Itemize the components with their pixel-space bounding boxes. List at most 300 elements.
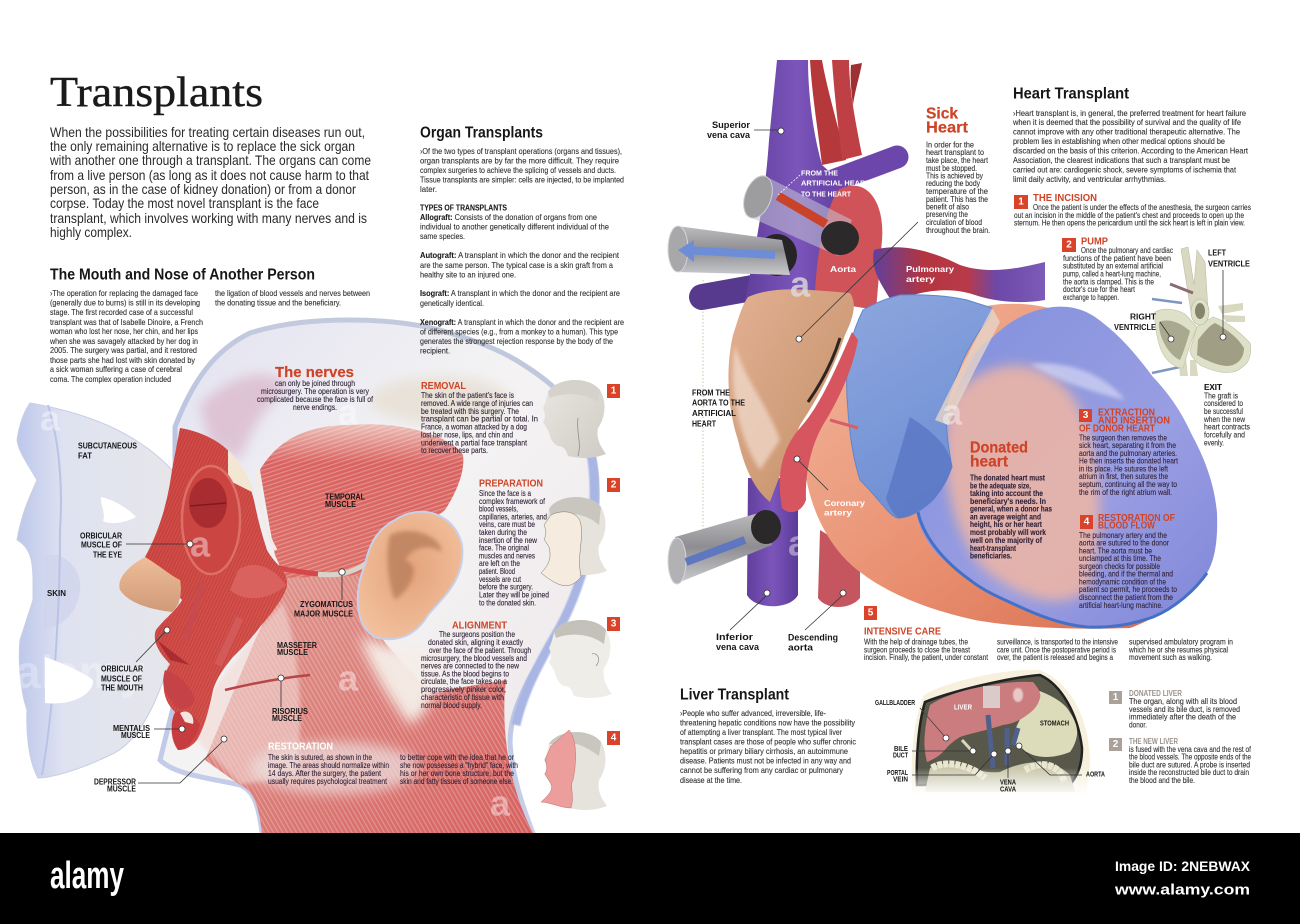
heart labels: artery (824, 508, 852, 518)
heart labels: Coronary (824, 498, 865, 508)
text block: mouth and nose: transplant was that of Isabelle Dinoire, a French (50, 317, 203, 327)
step: removal: lost her nose, lips, and chin and (421, 430, 513, 440)
face labels: ZYGOMATICUS (300, 600, 354, 609)
face labels: MUSCLE (325, 500, 357, 509)
lips (157, 640, 190, 665)
text block: heart transplant: carried out are: cardiogenic shock, severe symptoms of ischemia that (1013, 164, 1237, 174)
step 2: pump: exchange to happen. (1063, 292, 1119, 302)
face labels: ORBICULAR (80, 532, 122, 540)
title: Transplants (50, 70, 263, 116)
diagram: liver anatomy: LIVER (954, 704, 972, 712)
step: preparation: patient. Blood (479, 566, 515, 576)
diagram: liver anatomy (875, 670, 1105, 796)
zygomatic tendon (315, 562, 368, 575)
upper cannula (738, 172, 859, 256)
step 5: intensive care: which he or she resumes physical (1128, 644, 1228, 654)
step 3: extraction and insertion (1079, 408, 1178, 497)
step: preparation: are left on the (479, 558, 520, 568)
intro text: When the possibilities for treating certain diseases run out, (50, 124, 365, 140)
text block: organ transplants: same species. (420, 231, 465, 241)
callout: donated heart: beneficiaries. (970, 550, 1012, 560)
footer bar (0, 833, 1300, 924)
intro text (49, 124, 371, 240)
text block: organ transplants: healthy site to an injured one. (420, 270, 516, 280)
step: restoration: to better cope with the idea that he or (400, 752, 514, 762)
step 4: restoration of blood flow: The pulmonary artery and the (1079, 530, 1167, 540)
step 5: intensive care: surgeon proceeds to close the breast (864, 644, 970, 654)
text block: liver transplant: hepatitis or primary biliary cirrhosis, an autoimmune (680, 746, 848, 756)
intro text: highly complex. (50, 224, 132, 240)
watermark letters (788, 264, 963, 564)
icon: head step 2 (541, 497, 607, 586)
face labels: MUSCLE OF (81, 540, 122, 550)
step 5: intensive care: INTENSIVE CARE (864, 626, 941, 638)
ear (358, 512, 462, 639)
step: alignment: donated skin, aligning it exactly (428, 637, 524, 647)
text block: liver transplant: disease at the time. (680, 775, 742, 785)
heart labels: Inferior (716, 632, 753, 643)
text block: mouth and nose: woman who lost her nose, her chin, and her lips (49, 326, 198, 336)
heart labels: vena cava (707, 130, 751, 141)
face labels: THE MOUTH (101, 684, 143, 692)
text block: organ transplants: Xenograft: A transplant in which the donor and the recipient are (420, 317, 624, 327)
exit text (1203, 382, 1250, 448)
text block: heart transplant: cannot improve with any other traditional therapeutic alternative. The (1013, 126, 1240, 136)
eye hole (101, 497, 136, 523)
vessels (988, 715, 1018, 768)
diagram: small heart cross-section (1114, 247, 1251, 376)
step 2: pump: substituted by an external artificial (1063, 260, 1163, 270)
pale beige hair-like stripes (370, 376, 510, 424)
lower cannula (668, 510, 781, 584)
intro text: with another one through a transplant. The organs can come (49, 152, 371, 168)
step 3: extraction and insertion: aorta and the pulmonary arteries. (1079, 448, 1177, 458)
risorius (225, 675, 310, 690)
text block: mouth and nose: those parts she had lost with skin donated by (50, 355, 196, 365)
cream temple patch (228, 450, 254, 493)
step: restoration: she now possesses a "hybrid" face, with (400, 760, 518, 770)
step 4: restoration of blood flow: artificial heart-lung machine. (1079, 600, 1163, 610)
step badges: face: 4 (611, 732, 617, 744)
stomach (1013, 690, 1077, 757)
liver step 2: the new liver: 2 (1113, 739, 1119, 750)
callout: donated heart: most probably will work (970, 527, 1046, 537)
step 3: extraction and insertion: sick heart, separating it from the (1079, 440, 1176, 450)
step 2: pump: functions of the patient have been (1063, 253, 1171, 263)
face labels: MASSETER (277, 641, 317, 650)
pale tendon strip between lobes (935, 308, 1000, 425)
step 5: intensive care: over, the patient is released and begins a (997, 652, 1113, 662)
step: removal: The skin of the patient's face is (421, 390, 514, 400)
bottom fade (910, 768, 1092, 796)
face labels: FAT (78, 452, 92, 460)
pale skin over lower cheek (197, 603, 300, 785)
heading: mouth and nose: The Mouth and Nose of Another Person (50, 266, 315, 284)
step: preparation: capillaries, arteries, and (479, 512, 547, 522)
text block: mouth and nose: (generally due to burns) is still in its developing (50, 298, 200, 308)
text block: liver transplant: disease. Patients must not be infected in any way and (680, 756, 851, 766)
back of head blue band (516, 425, 594, 725)
intro text: transplant, which involves working with many nerves and is (50, 210, 367, 226)
step: alignment: ALIGNMENT (452, 620, 507, 632)
step: removal: REMOVAL (421, 381, 466, 392)
step 4: restoration of blood flow: surgeon checks for possible (1079, 561, 1160, 571)
step: preparation: vessels are cut (479, 574, 521, 584)
step 3: extraction and insertion: the rim of the right atrium wall. (1079, 487, 1172, 497)
exit text: EXIT (1204, 382, 1223, 392)
heart labels: aorta (788, 642, 814, 654)
callout: donated heart: heart (970, 454, 1009, 470)
step 4: restoration of blood flow: hemodynamic condition of the (1079, 576, 1166, 586)
step 2: pump: pump, called a heart-lung machine, (1063, 268, 1161, 278)
heart labels: FROM THE (801, 168, 838, 178)
step 5: intensive care (864, 606, 1233, 662)
descending aorta (818, 530, 860, 607)
step: restoration: usually requires psychological treatment (268, 776, 387, 786)
step 4: restoration of blood flow: BLOOD FLOW (1098, 520, 1155, 532)
heart labels: ARTIFICIAL (692, 409, 736, 418)
great vessel tubes (1181, 247, 1208, 318)
heart labels: artery (906, 274, 935, 284)
liver step 1: donated liver: vessels and its bile duct, is removed (1129, 704, 1240, 714)
callout: donated heart: well on the majority of (969, 535, 1042, 545)
step 4: restoration of blood flow (1079, 513, 1177, 610)
heart labels: ARTIFICIAL HEART (801, 178, 870, 188)
cheek and neck muscles (205, 575, 533, 833)
watermark letters: a (190, 524, 211, 564)
step 4: restoration of blood flow: 4 (1084, 516, 1090, 528)
face labels: THE EYE (93, 550, 123, 560)
text block: organ transplants: organ transplants are by far the more difficult. They require (420, 156, 619, 166)
callout: sick heart: circulation of blood (926, 217, 982, 227)
diagram: liver anatomy: STOMACH (1040, 720, 1069, 728)
liver step 1: donated liver: immediately after the death of the (1129, 712, 1236, 722)
step 2: pump: the aorta is clamped. This is the (1063, 276, 1154, 286)
face labels: MUSCLE (121, 731, 151, 740)
feed lines (1170, 284, 1193, 293)
aortic opening (1191, 299, 1209, 325)
diagram: small heart cross-section: VENTRICLE (1208, 260, 1251, 268)
exit text: considered to (1204, 398, 1243, 408)
step 3: extraction and insertion: The surgeon then removes the (1079, 432, 1167, 442)
translucent donor membrane (917, 307, 1217, 627)
text block: organ transplants: later. (420, 184, 437, 194)
heart labels: AORTA TO THE (692, 398, 746, 408)
text block: organ transplants: of different species (e.g., from a monkey to a human). This type (420, 326, 618, 336)
callout: donated heart (969, 440, 1052, 560)
callout: sick heart: reducing the body (926, 178, 981, 188)
illustration: heart (668, 60, 1217, 629)
text block: mouth and nose: the donating tissue and the beneficiary. (215, 298, 341, 308)
step 4: restoration of blood flow: RESTORATION OF (1098, 513, 1175, 524)
eye socket (182, 466, 240, 574)
liver step 2: the new liver: is fused with the vena cava and the rest of (1129, 744, 1251, 754)
heart labels: Pulmonary (906, 264, 954, 274)
intro text: the only remaining alternative is to replace the sick organ (50, 138, 355, 154)
liver step 1: donated liver: The organ, along with all its blood (1129, 696, 1237, 706)
step: preparation: veins, care must be (479, 519, 535, 529)
heart labels: HEART (692, 420, 716, 428)
step: preparation: Later they will be joined (479, 590, 549, 600)
step 3: extraction and insertion: atrium in first, then sutures the (1079, 471, 1168, 481)
watermark letters (15, 392, 511, 824)
step 5: intensive care: surveillance, is transported to the intensive (997, 636, 1118, 646)
face labels: SKIN (47, 589, 66, 598)
callout: sick heart: benefit of also (926, 202, 969, 212)
diagram: liver anatomy: GALLBLADDER (875, 700, 915, 707)
face labels: ORBICULAR (101, 664, 143, 674)
text block: liver transplant: transplant cases are those of people who suffer chronic (680, 736, 857, 746)
step: restoration: RESTORATION (268, 742, 333, 752)
step 2: pump: doctor's cue for the heart (1063, 284, 1135, 294)
text block: liver transplant (680, 708, 857, 785)
face labels: DEPRESSOR (94, 778, 136, 786)
step: preparation: PREPARATION (479, 478, 543, 490)
diagram: small heart cross-section: VENTRICLE (1114, 323, 1157, 332)
step: alignment: over the face of the patient. Through (429, 645, 531, 655)
text block: mouth and nose: 2005. The surgery was partial, and it restored (50, 345, 197, 355)
icon: head step 3 (549, 620, 612, 698)
dotted guide (702, 280, 704, 530)
step 3: extraction and insertion: 3 (1083, 410, 1089, 421)
step 3: extraction and insertion: in its place. He sutures the left (1079, 464, 1168, 474)
heart labels: vena cava (716, 642, 760, 653)
callout: donated heart: beneficiary's needs. In (970, 496, 1046, 506)
step 2: pump (1062, 236, 1174, 302)
membrane lower edge (917, 507, 1207, 627)
cheek bundle (230, 565, 286, 598)
step badges: face: 3 (611, 618, 617, 630)
head silhouette (160, 320, 597, 833)
text block: mouth and nose: ›The operation for replacing the damaged face (50, 288, 198, 298)
inferior vena cava (747, 478, 798, 606)
pale tendon patch under ear (360, 635, 445, 725)
face labels: RISORIUS (272, 707, 309, 716)
step: preparation: complex framework of (479, 496, 545, 506)
liver step 1: donated liver (1109, 688, 1240, 730)
step badges: face: 2 (611, 480, 617, 490)
step: preparation: before the surgery. (479, 582, 533, 592)
step 3: extraction and insertion: EXTRACTION (1098, 408, 1155, 418)
step: removal: transplant can be partial or total. In (421, 414, 538, 424)
footer image id: Image ID: 2NEBWAX (1115, 858, 1251, 874)
translucent skin mask (17, 403, 185, 778)
step 2: pump: 2 (1066, 240, 1072, 250)
step: restoration: image. The areas should normalize within (268, 760, 389, 770)
diagram: liver anatomy: DUCT (893, 752, 909, 760)
step 3: extraction and insertion: septum, continuing all the way to (1079, 479, 1177, 489)
coronary artery (780, 332, 858, 512)
text block: liver transplant: threatening hepatic conditions now have the possibility (680, 718, 856, 728)
callout: sick heart: Heart (926, 120, 969, 136)
text block: heart transplant: when it is deemed that the possibility of survival and the quality of life (1012, 117, 1241, 127)
intestines (925, 762, 1075, 792)
heart labels: TO THE HEART (801, 190, 851, 198)
callout: the nerves (257, 364, 373, 412)
step: preparation: muscles and nerves (479, 550, 535, 560)
text block: organ transplants: Allograft: Consists of the donation of organs from one (420, 212, 597, 222)
red aortic branches (810, 60, 862, 165)
step: alignment: circulate, the face takes on a (421, 676, 507, 686)
exit text: be successful (1204, 406, 1243, 416)
text block: organ transplants: Tissue transplants are simpler: cells are injected, to be implanted (420, 174, 624, 184)
watermark letters: a (40, 398, 61, 438)
callout: the nerves: can only be joined through (275, 378, 355, 388)
step 5: intensive care: With the help of drainage tubes, the (864, 636, 968, 646)
callout: donated heart: Donated (970, 440, 1028, 456)
liver step 2: the new liver: THE NEW LIVER (1129, 736, 1179, 746)
text block: organ transplants: TYPES OF TRANSPLANTS (420, 202, 507, 212)
pulmonary artery (873, 247, 1045, 302)
text block: liver transplant: ›People who suffer advanced, irreversible, life- (680, 708, 826, 718)
step: preparation (479, 478, 549, 608)
step: removal: removed. A wide range of injuries can (421, 398, 533, 408)
callout: donated heart: taking into account the (970, 488, 1043, 498)
step: removal: underwent a partial face transplant (421, 438, 527, 448)
text block: heart transplant: problem lies in establishing when other medical options should be (1013, 136, 1225, 146)
text block: mouth and nose: a sick woman suffering a case of cerebral (50, 364, 182, 374)
heart labels (692, 120, 954, 654)
callout: sick heart: temperature of the (926, 186, 988, 196)
callout: donated heart: height, his or her heart (970, 519, 1042, 529)
step: alignment: normal blood supply. (421, 700, 482, 710)
callout: sick heart: must be stopped. (926, 163, 977, 173)
face labels: MUSCLE OF (101, 674, 142, 684)
text block: organ transplants: Isograft: A transplant in which the donor and the recipient are (420, 288, 620, 298)
liver step 2: the new liver: bile duct are sutured. A probe is inserted (1129, 760, 1250, 770)
callout: donated heart: The donated heart must (970, 472, 1045, 482)
callout: donated heart: heart-transplant (970, 543, 1016, 553)
heading: organ transplants: Organ Transplants (420, 124, 543, 142)
step: alignment (421, 620, 531, 710)
callout: the nerves: nerve endings. (293, 402, 337, 412)
callout: sick heart (926, 106, 990, 235)
callout: the nerves: complicated because the face is full of (257, 394, 373, 404)
step badges: face: 1 (611, 386, 617, 396)
step: restoration: 14 days. After the surgery, the patient (268, 768, 381, 778)
callout: sick heart: In order for the (926, 140, 974, 150)
exit text: The graft is (1204, 390, 1238, 400)
step 4: restoration of blood flow: patient so permit, he proceeds to (1079, 584, 1177, 594)
icon: head step 1 (543, 380, 606, 458)
left heart lobe (1155, 309, 1197, 368)
step: preparation: Since the face is a (479, 488, 531, 498)
step: alignment: characteristic of tissue with (421, 692, 504, 702)
pale membrane highlight (1030, 363, 1125, 400)
callout: donated heart: general, when a donor has (970, 504, 1052, 514)
text block: heart transplant: ›Heart transplant is, in general, the preferred treatment for heart failure (1013, 108, 1246, 118)
step 3: extraction and insertion: AND INSERTION (1098, 416, 1170, 426)
step: alignment: The surgeons position the (439, 629, 515, 639)
step: restoration: his or her own bone structure, but the (400, 768, 514, 778)
callout: sick heart: heart transplant to (926, 147, 984, 157)
nose (119, 557, 181, 612)
step 5: intensive care: movement such as walking. (1129, 652, 1212, 662)
watermark letters: a (790, 264, 811, 304)
liver step 2: the new liver: inside the reconstructed bile duct to drain (1129, 767, 1249, 777)
step 5: intensive care: incision. Finally, the patient, under constant (864, 652, 988, 662)
intro text: corpse. Today the most novel transplant is the face (50, 195, 319, 211)
text block: heart transplant: Association, the clearest indications that such a transplant must be (1013, 155, 1230, 165)
heart labels: Descending (788, 632, 838, 644)
callout: sick heart: patient. This has the (926, 194, 988, 204)
face labels: MUSCLE (277, 648, 309, 657)
pink donor core (945, 365, 1099, 601)
liver step 1: donated liver: DONATED LIVER (1129, 688, 1183, 698)
middle cannula (668, 226, 797, 276)
diagram: liver anatomy: BILE (894, 746, 908, 753)
sick heart (728, 289, 854, 502)
watermark letters: a (788, 522, 809, 564)
step 2: pump: Once the pulmonary and cardiac (1081, 245, 1174, 255)
callout: the nerves: The nerves (275, 364, 354, 381)
step 4: restoration of blood flow: aorta are sutured to the donor (1079, 538, 1169, 548)
callout: donated heart: be the adequate size, (970, 480, 1031, 490)
text block: mouth and nose: when she was savagely attacked by her dog in (49, 336, 198, 346)
callout: sick heart: take place, the heart (926, 155, 988, 165)
exit text: heart contracts (1204, 422, 1250, 432)
step: removal: France, a woman attacked by a dog (421, 422, 527, 432)
chin muscle (172, 712, 200, 750)
face labels: MUSCLE (107, 784, 137, 794)
step 5: intensive care: supervised ambulatory program in (1129, 636, 1233, 646)
mouth hole (45, 657, 93, 703)
text block: organ transplants: are the same person. The typical case is a skin graft from a (420, 260, 613, 270)
step: preparation: to the donated skin. (479, 598, 536, 608)
diagram: liver anatomy: VEIN (893, 776, 908, 784)
exit text: when the new (1203, 414, 1246, 424)
text block: mouth and nose (49, 288, 370, 384)
face labels: MAJOR MUSCLE (294, 610, 354, 618)
heart labels: Aorta (830, 264, 856, 274)
left purple stub (702, 287, 758, 297)
diagram: liver anatomy: PORTAL (887, 770, 909, 777)
face labels: MUSCLE (272, 714, 303, 723)
illustration: face transplant head anatomy (15, 320, 597, 833)
callout: sick heart: This is achieved by (926, 170, 984, 180)
step badges: face (607, 384, 620, 745)
temporal muscle (260, 424, 463, 578)
liver leader lines (912, 708, 1082, 778)
heart labels: Superior (712, 120, 750, 131)
watermark letters: a (338, 392, 359, 432)
text block: liver transplant: cannot be suffering from any cardiac or pulmonary (680, 765, 844, 775)
face labels: TEMPORAL (325, 492, 365, 502)
step: alignment: nerves are connected to the new (421, 660, 520, 670)
diagram: small heart cross-section: RIGHT (1130, 312, 1156, 322)
blue left lobe (847, 295, 992, 518)
step 5: intensive care: 5 (868, 608, 874, 618)
step 5: intensive care: care unit. Once the postoperative period is (997, 644, 1116, 654)
footer url: www.alamy.com (1114, 882, 1250, 898)
step 4: restoration of blood flow: unclamped at this time. The (1079, 553, 1161, 563)
text block: organ transplants: Autograft: A transplant in which the donor and the recipient (420, 250, 620, 260)
step: removal: to recover these parts. (421, 445, 488, 455)
step 4: restoration of blood flow: disconnect the patient from the (1079, 592, 1173, 602)
restoration pale area (250, 742, 420, 794)
callout: sick heart: Sick (926, 106, 958, 122)
liver step 1: donated liver: donor. (1129, 720, 1147, 730)
callout: the nerves: microsurgery. The operation is very (261, 386, 370, 396)
text block: liver transplant: of attempting a liver transplant. The most typical liver (680, 727, 842, 737)
diagram: small heart cross-section: LEFT (1208, 248, 1226, 258)
text block: organ transplants: ›Of the two types of transplant operations (organs and tissues), (420, 146, 622, 156)
diagram: liver anatomy: AORTA (1086, 772, 1105, 778)
donated heart body (805, 304, 1213, 629)
text block: organ transplants (420, 146, 624, 356)
liver step 2: the new liver: the blood vessels. The opposite ends of the (1129, 752, 1251, 762)
step: preparation: face. The original (479, 542, 529, 552)
